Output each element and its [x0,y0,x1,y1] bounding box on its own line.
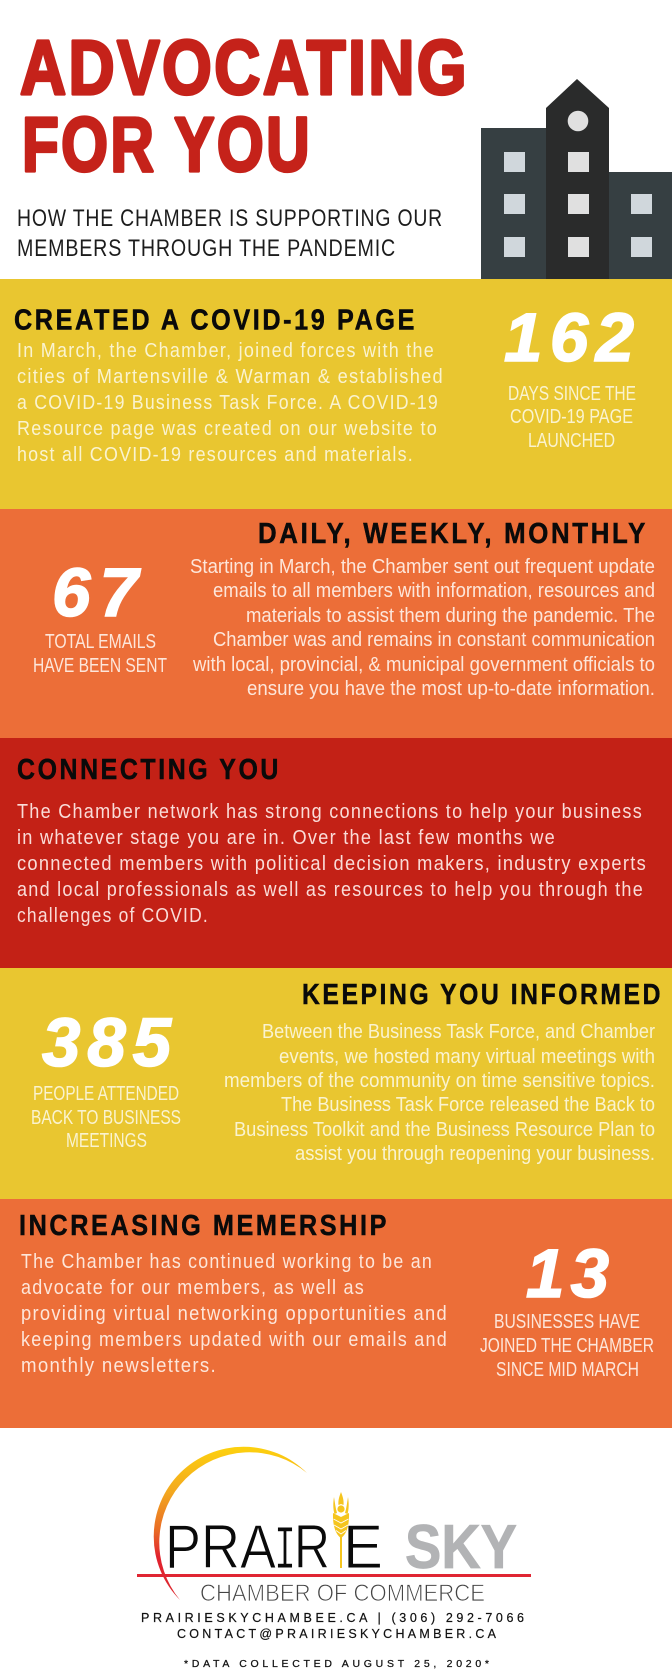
data note: *DATA COLLECTED AUGUST 25, 2020* [184,1658,489,1670]
stat number: 385: 385 [42,1004,173,1081]
stat caption: COVID-19 PAGE [510,406,633,428]
heading: created a covid-19 page: CREATED A COVID-19 PAGE [14,304,417,336]
stat caption: LAUNCHED [528,430,615,452]
heading: increasing memership: INCREASING MEMERSHIP [19,1210,389,1242]
body text: advocate for our members, as well as [21,1277,365,1299]
stat caption [31,1083,181,1152]
body text: monthly newsletters. [21,1355,217,1377]
body text: host all COVID-19 resources and materials. [17,444,414,466]
logo word: prairie: R [294,1513,330,1582]
body text: providing virtual networking opportunities and [21,1303,448,1325]
body text: cities of Martensville & Warman & established [17,366,444,388]
stat caption: TOTAL EMAILS [45,631,156,653]
body text: Resource page was created on our website to [17,418,438,440]
body text [17,801,647,927]
body text [21,1251,448,1377]
body text [190,556,655,700]
title: ADVOCATING [20,25,469,111]
subtitle [17,205,443,262]
body text: challenges of COVID. [17,905,209,927]
icon: building [481,79,672,280]
stat caption: MEETINGS [66,1130,147,1152]
body text: a COVID-19 Business Task Force. A COVID-19 [17,392,439,414]
contact details [141,1611,524,1641]
body text: keeping members updated with our emails and [21,1329,448,1351]
title [20,25,469,188]
panel: created a covid-19 page [0,279,672,509]
logo word: prairie: I [274,1516,296,1587]
stat caption [480,1311,654,1381]
logo arc [154,1447,307,1600]
body text: in whatever stage you are in. Over the last few months we [17,827,556,849]
panel: increasing memership [0,1199,672,1428]
footer [137,1447,531,1670]
body text: The Chamber has continued working to be an [21,1251,433,1273]
contact details: PRAIRIESKYCHAMBEE.CA | (306) 292-7066 [141,1611,524,1625]
body text: events, we hosted many virtual meetings with [279,1046,655,1068]
stat caption [508,383,636,452]
body text [224,1021,655,1165]
header [17,25,672,280]
stat number: 162: 162 [504,299,634,376]
body text: In March, the Chamber, joined forces with the [17,340,435,362]
panel: connecting you [0,738,672,968]
stat caption: HAVE BEEN SENT [33,655,167,677]
stat caption [33,631,167,677]
logo word: prairie: E [343,1513,383,1582]
logo word: sky: SKY [405,1513,517,1582]
logo word: prairie: PRA [165,1513,277,1582]
panel: keeping you informed [0,968,672,1199]
stat caption: DAYS SINCE THE [508,383,636,405]
stat number: 13: 13 [526,1235,609,1312]
body text [17,340,444,466]
logo word: prairie [165,1513,383,1587]
subtitle: HOW THE CHAMBER IS SUPPORTING OUR [17,205,443,232]
title: FOR YOU [22,102,312,188]
logo: prairie sky chamber of commerce [137,1447,531,1607]
logo tagline: CHAMBER OF COMMERCE [200,1580,485,1607]
icon: wheat stalk [333,1492,349,1568]
panel: daily, weekly, monthly [0,509,672,738]
stat number: 67: 67 [52,554,142,631]
stat caption: BACK TO BUSINESS [31,1107,181,1129]
subtitle: MEMBERS THROUGH THE PANDEMIC [17,235,396,262]
body text: members of the community on time sensitive topics. [224,1070,655,1092]
stat caption: PEOPLE ATTENDED [33,1083,179,1105]
heading: connecting you: CONNECTING YOU [17,754,281,786]
body text: ensure you have the most up-to-date information. [247,678,655,700]
logo rule [137,1574,531,1577]
contact details: CONTACT@PRAIRIESKYCHAMBER.CA [177,1627,497,1641]
